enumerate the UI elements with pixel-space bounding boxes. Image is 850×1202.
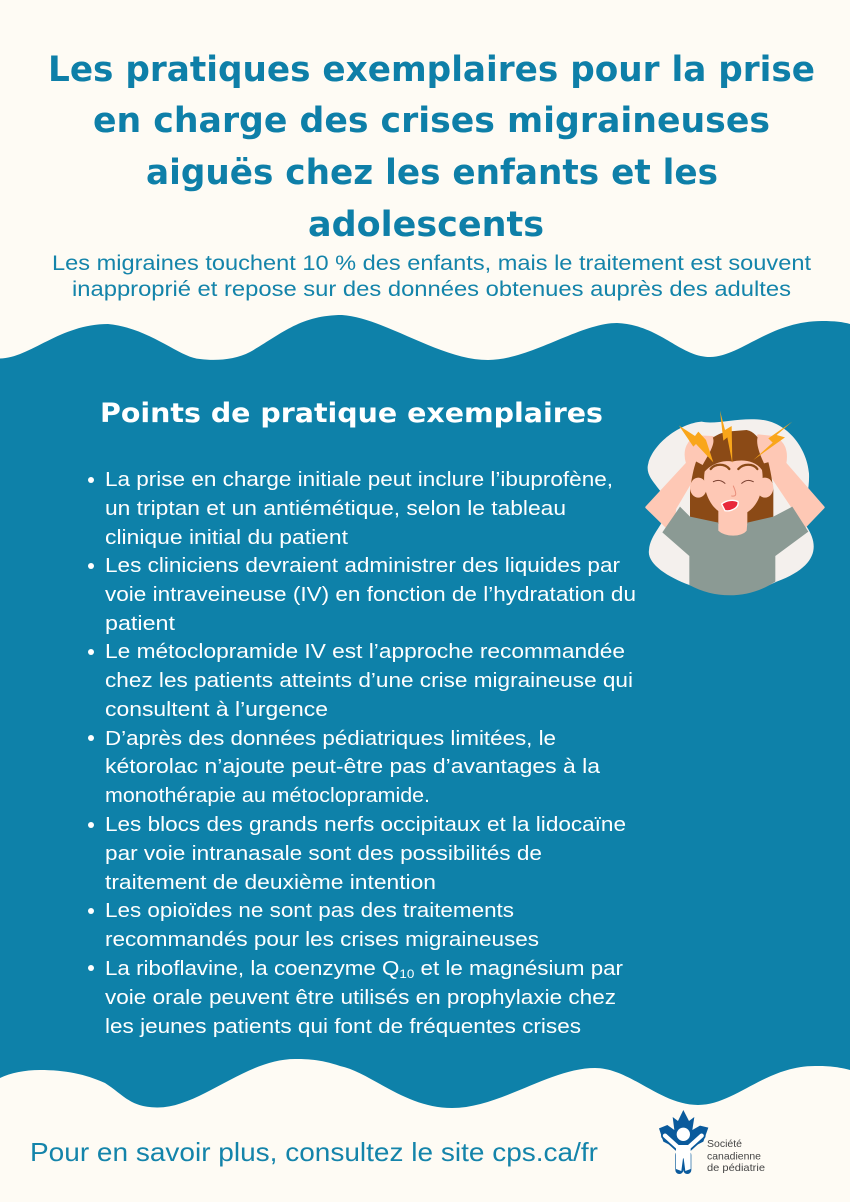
heading: Points de pratique exemplaires [100, 398, 603, 429]
title [48, 50, 815, 245]
logo: Société canadienne de pédiatrie: de pédiatrie [707, 1162, 765, 1174]
title: Les pratiques exemplaires pour la prise [48, 50, 815, 90]
bullet list: voie orale peuvent être utilisés en prophylaxie chez [105, 987, 616, 1009]
footer link text: Pour en savoir plus, consultez le site cps.ca/fr [30, 1137, 598, 1167]
logo: Société canadienne de pédiatrie: Société [707, 1138, 742, 1150]
logo: Société canadienne de pédiatrie: canadienne [707, 1150, 761, 1162]
bullet list: par voie intranasale sont des possibilités de [105, 843, 542, 865]
bullet list: et le magnésium par [414, 958, 623, 980]
subtitle: Les migraines touchent 10 % des enfants, mais le traitement est souvent [52, 252, 811, 275]
bullet list: kétorolac n’ajoute peut-être pas d’avantages à la [105, 756, 601, 778]
bullet list: Les cliniciens devraient administrer des liquides par [105, 555, 620, 577]
bullet list: La riboflavine, la coenzyme Q [105, 958, 368, 980]
subtitle [52, 252, 811, 301]
bullet list: consultent à l’urgence [105, 699, 328, 721]
bullet list: Le métoclopramide IV est l’approche recommandée [105, 641, 625, 663]
bullet list: 10 [399, 967, 415, 981]
bullet list: Les opioïdes ne sont pas des traitements [105, 900, 514, 922]
bullet list: recommandés pour les crises migraineuses [105, 929, 539, 951]
bullet list: clinique initial du patient [105, 527, 348, 549]
icon: person with migraine [647, 411, 823, 595]
logo: Société canadienne de pédiatrie [659, 1110, 765, 1174]
bullet list: monothérapie au métoclopramide. [105, 785, 430, 807]
subtitle: inapproprié et repose sur des données obtenues auprès des adultes [72, 278, 791, 301]
blue wave panel [0, 315, 850, 1108]
bullet list: les jeunes patients qui font de fréquentes crises [105, 1016, 581, 1038]
bullet list: D’après des données pédiatriques limitées, le [105, 728, 556, 750]
title: aiguës chez les enfants et les [146, 153, 718, 193]
bullet list: chez les patients atteints d’une crise migraineuse qui [105, 670, 633, 692]
bullet list: patient [105, 613, 176, 635]
bullet list: voie intraveineuse (IV) en fonction de l’hydratation du [105, 584, 636, 606]
bullet list: un triptan et un antiémétique, selon le tableau [105, 498, 566, 520]
title: adolescents [308, 205, 544, 245]
title: en charge des crises migraineuses [93, 101, 770, 141]
bullet list: Les blocs des grands nerfs occipitaux et la lidocaïne [105, 814, 626, 836]
bullet list: La prise en charge initiale peut inclure l’ibuprofène, [105, 469, 613, 491]
bullet list [88, 469, 636, 1038]
bullet list: traitement de deuxième intention [105, 872, 436, 894]
